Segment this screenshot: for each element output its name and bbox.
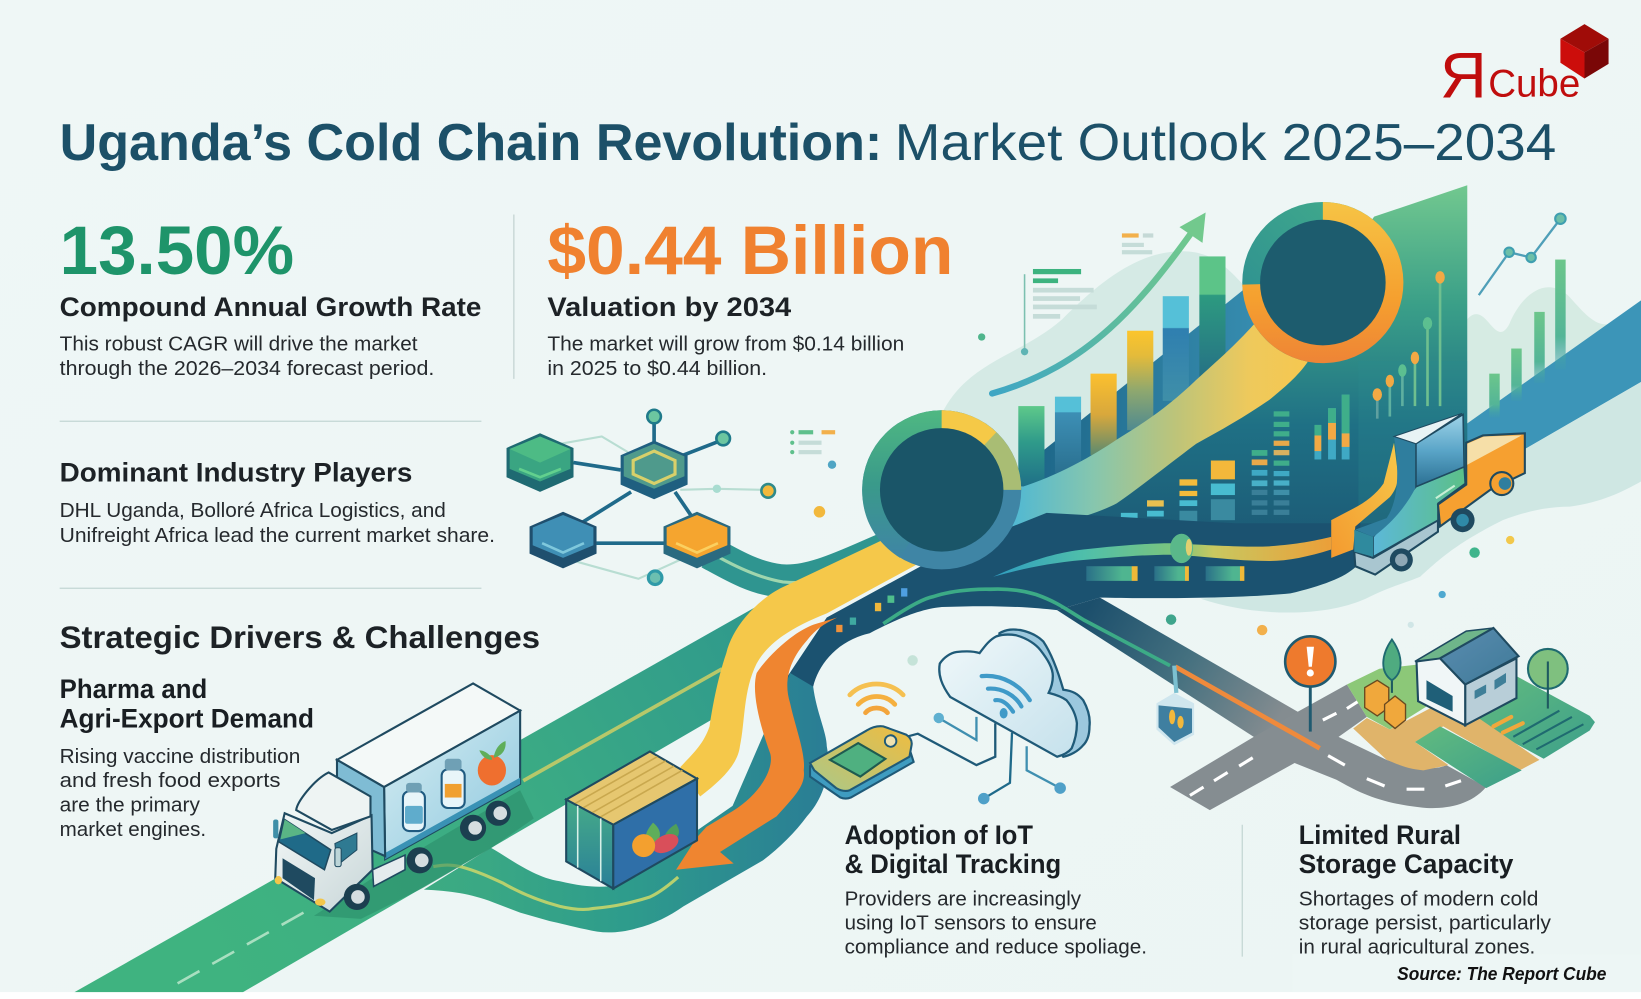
yellow ribbon <box>680 521 937 796</box>
flow cells <box>1086 566 1244 581</box>
tree: cone <box>1383 639 1401 693</box>
shipping container <box>566 751 697 889</box>
section: dominant players: Unifreight Africa lead the current market share. <box>60 525 495 547</box>
links <box>574 423 718 543</box>
green triangle panel <box>1047 185 1467 586</box>
logo: RCube: Я <box>1440 38 1487 111</box>
illustration: market growth chart <box>942 185 1641 586</box>
nodes <box>647 410 661 423</box>
land: green north-west <box>1347 665 1426 729</box>
section: dominant players: DHL Uganda, Bolloré Africa Logistics, and <box>60 500 446 522</box>
driver: rural storage <box>1299 820 1552 958</box>
driver: rural storage: Storage Capacity <box>1299 849 1513 879</box>
source note <box>1292 955 1641 992</box>
road shadow <box>314 790 534 919</box>
heading: strategic drivers: Strategic Drivers & Challenges <box>60 619 540 655</box>
right blue band <box>1465 300 1641 484</box>
driver: IoT adoption: using IoT sensors to ensure <box>845 912 1097 934</box>
mini list <box>1021 233 1153 355</box>
land: tan path <box>1353 698 1539 770</box>
side mirror <box>273 820 278 838</box>
cloud front <box>939 635 1077 757</box>
trailer top <box>337 683 520 787</box>
hexagon: gold centre <box>621 441 688 499</box>
section: dominant players <box>60 456 495 547</box>
icon: vaccine vial with orange label <box>442 759 465 808</box>
tracker tag <box>810 726 914 799</box>
cube <box>1560 24 1609 78</box>
pale hills behind chart <box>942 251 1256 523</box>
stat: valuation: Valuation by 2034 <box>547 291 791 322</box>
stat: valuation: $0.44 Billion <box>547 211 953 289</box>
grille <box>283 858 315 900</box>
flow line to truck <box>993 443 1398 581</box>
truck roof <box>1394 413 1462 444</box>
driver: rural storage: in rural agricultural zones. <box>1299 936 1535 958</box>
grey arms <box>1170 684 1486 810</box>
pale links <box>555 436 762 579</box>
branch centre line <box>433 865 678 910</box>
bottom white strip <box>0 992 1641 999</box>
orange wifi <box>850 684 903 713</box>
field rows <box>1513 711 1583 749</box>
driver: rural storage: Shortages of modern cold <box>1299 888 1538 910</box>
driver: pharma and agri-export: are the primary <box>60 795 201 817</box>
divider: stats <box>513 215 515 379</box>
section: dominant players: Dominant Industry Players <box>60 456 412 487</box>
cab body <box>275 813 373 912</box>
stat: valuation <box>547 211 953 380</box>
road dashes <box>1190 701 1461 795</box>
scattered dots <box>814 333 1514 666</box>
driver: rural storage: Limited Rural <box>1299 820 1461 850</box>
teal ribbon from network <box>710 549 884 583</box>
side window <box>335 833 357 866</box>
driver: pharma and agri-export: market engines. <box>60 819 206 841</box>
orange ribbon with arrow <box>676 618 837 870</box>
warehouse <box>1415 628 1519 725</box>
icon: apple <box>478 741 506 785</box>
IoT cloud and tracker <box>810 629 1090 804</box>
stat: CAGR <box>60 211 481 380</box>
green route line <box>883 589 1170 666</box>
front wheel <box>344 884 370 910</box>
land: green south-east <box>1477 676 1595 759</box>
logo: RCube: Cube <box>1488 62 1580 105</box>
tree: round <box>1528 649 1568 709</box>
driver: pharma and agri-export: Rising vaccine distribution <box>60 746 300 768</box>
icon: fruit <box>632 823 681 857</box>
network diagram <box>507 410 775 585</box>
chassis <box>373 855 405 886</box>
small donut <box>862 410 1021 569</box>
hexagon: orange <box>664 512 730 568</box>
driver: pharma and agri-export: and fresh food exports <box>60 770 280 792</box>
cab roof deflector <box>296 772 370 830</box>
circuit lines <box>906 717 1060 799</box>
driver: pharma and agri-export: Agri-Export Demand <box>60 703 314 733</box>
main green road <box>74 603 769 992</box>
driver: rural storage: storage persist, particularly <box>1299 912 1552 934</box>
road centre dashes <box>167 913 304 989</box>
road sensor box <box>1156 666 1194 745</box>
driver: IoT adoption: & Digital Tracking <box>845 849 1061 879</box>
driver: pharma and agri-export <box>60 674 314 841</box>
driver: IoT adoption: Providers are increasingly <box>845 888 1082 910</box>
pale hills right <box>1467 287 1622 429</box>
headlights <box>275 876 282 884</box>
trailer front <box>337 760 385 856</box>
mini legend near network <box>790 430 835 454</box>
land: green patch <box>1415 726 1522 788</box>
stat: CAGR: 13.50% <box>60 211 294 289</box>
title: Uganda’s Cold Chain Revolution: <box>60 114 882 172</box>
yellow growth ribbon <box>1010 324 1308 534</box>
hexagon: blue <box>530 512 597 568</box>
source note: Source: The Report Cube <box>1397 963 1606 984</box>
truck orange box <box>1438 433 1525 526</box>
truck cargo window <box>1416 414 1464 487</box>
divider <box>60 420 481 422</box>
divider <box>60 587 481 589</box>
driver: IoT adoption: compliance and reduce spoliage. <box>845 936 1147 958</box>
cloud back <box>999 629 1090 757</box>
truck base <box>1354 520 1438 575</box>
logo: RCube <box>1440 24 1609 111</box>
right bars <box>1489 260 1566 418</box>
truck wheels <box>1390 472 1513 571</box>
title <box>60 114 1556 172</box>
windshield <box>278 820 331 870</box>
orange route line <box>1175 667 1320 748</box>
reefer truck <box>273 683 534 919</box>
driver: IoT adoption: Adoption of IoT <box>845 820 1033 850</box>
rear wheels <box>407 801 511 873</box>
flow marker <box>1170 534 1193 563</box>
stat: CAGR: Compound Annual Growth Rate <box>60 291 481 322</box>
small data cells <box>1098 395 1350 529</box>
warning sign <box>1285 636 1335 732</box>
rural farm <box>1347 628 1595 788</box>
wifi symbol <box>982 676 1030 712</box>
divider <box>1241 825 1243 957</box>
north-west arm <box>1057 598 1337 763</box>
yellow stripe <box>523 669 722 781</box>
teal branch band <box>424 673 828 932</box>
stat: CAGR: through the 2026–2034 forecast period. <box>60 358 434 380</box>
bar chart: rising columns <box>1018 256 1226 487</box>
driver: IoT adoption <box>845 820 1147 958</box>
growth arrow <box>992 212 1206 394</box>
mint swoosh under truck <box>1200 382 1641 613</box>
hexagon: green <box>507 433 574 492</box>
stat: valuation: The market will grow from $0.14 billion <box>547 334 904 356</box>
driver: pharma and agri-export: Pharma and <box>60 674 207 704</box>
line chart <box>1479 214 1566 295</box>
title: Market Outlook 2025–2034 <box>895 114 1556 172</box>
right delivery truck <box>1354 413 1525 575</box>
crates <box>1365 680 1406 728</box>
blue diagonal band <box>1031 241 1361 555</box>
dark hub band <box>785 513 1361 687</box>
truck body green <box>1373 467 1465 557</box>
orange upward swoosh <box>1331 443 1398 558</box>
large donut <box>1242 202 1403 363</box>
trailer side <box>384 711 520 859</box>
stat: CAGR: This robust CAGR will drive the market <box>60 334 418 356</box>
grey road crossing <box>883 589 1486 810</box>
lollipop chart <box>1373 271 1445 419</box>
icon: vaccine vial <box>403 783 425 831</box>
truck front face <box>1355 436 1416 537</box>
dots along hub <box>836 588 907 632</box>
stat: valuation: in 2025 to $0.44 billion. <box>547 358 767 380</box>
